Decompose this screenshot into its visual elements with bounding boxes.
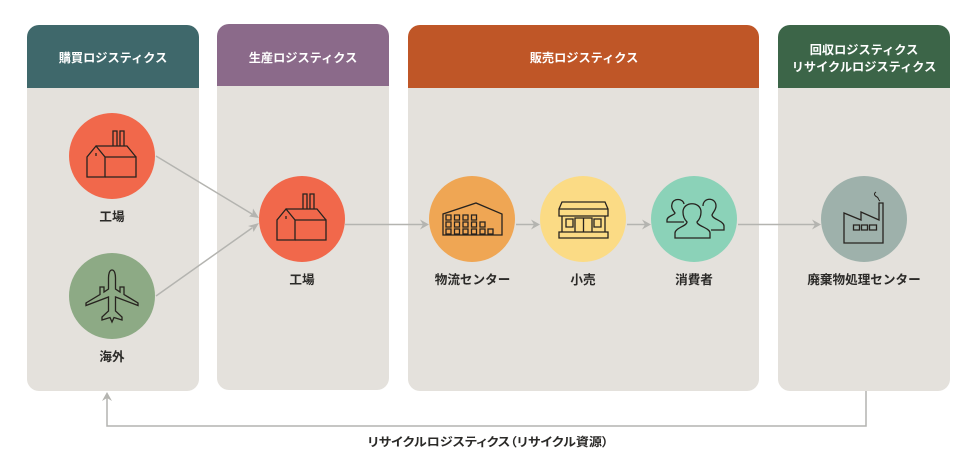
arrow: overseas factory to factory [156, 156, 259, 218]
panel: procurement logistics: 購買ロジスティクス [59, 50, 167, 65]
node: factory (production): 工場 [289, 272, 315, 287]
label: recycling logistics: リサイクルロジスティクス（リサイクル資源） [368, 433, 608, 450]
panel: collection and recycling logistics: 回収ロジスティクス [810, 43, 918, 57]
arrow: distribution center to retail [516, 220, 540, 230]
node: distribution center [429, 176, 515, 287]
arrow: overseas to factory [156, 223, 259, 296]
node: factory (procurement): 工場 [99, 209, 125, 224]
panel: production logistics: 生産ロジスティクス [249, 50, 357, 65]
panel: production logistics [217, 24, 389, 390]
node: factory (procurement) [69, 113, 155, 224]
arrow: consumer to waste center [738, 220, 821, 230]
node: overseas: 海外 [99, 349, 125, 364]
panel: collection and recycling logistics [778, 25, 950, 391]
node: waste processing center [807, 176, 921, 287]
node: retail: 小売 [570, 272, 596, 287]
node: retail [540, 176, 626, 287]
panel: procurement logistics [27, 25, 199, 391]
arrow: recycling return [102, 391, 866, 426]
arrow: factory to distribution center [345, 220, 429, 230]
node: distribution center: 物流センター [435, 272, 510, 287]
node: factory (production) [259, 176, 345, 287]
panel: collection and recycling logistics: リサイクルロジスティクス [792, 60, 936, 74]
node: consumer: 消費者 [675, 272, 713, 287]
node: waste processing center: 廃棄物処理センター [807, 272, 921, 287]
panel: sales logistics: 販売ロジスティクス [530, 50, 638, 65]
node: consumer [651, 176, 737, 287]
node: overseas [69, 253, 155, 364]
arrow: retail to consumer [627, 220, 651, 230]
panel: sales logistics [408, 25, 759, 391]
